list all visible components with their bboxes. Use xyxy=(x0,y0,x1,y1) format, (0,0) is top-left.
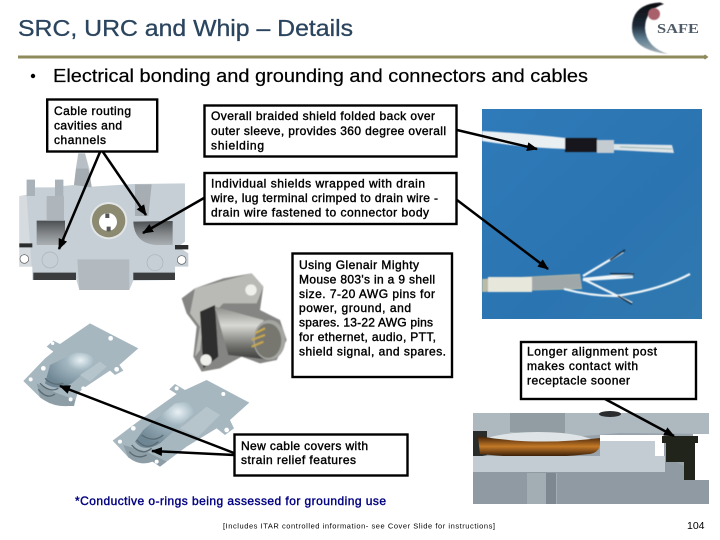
callout: alignment post xyxy=(521,342,696,399)
callout: Glenair connector: spares. 13-22 AWG pins xyxy=(299,316,433,330)
callout: cable covers xyxy=(234,434,408,476)
callout: Glenair connector xyxy=(292,254,452,377)
arrows xyxy=(59,130,674,455)
callout: overall braided shield: shielding xyxy=(211,138,264,152)
braided shield cable xyxy=(482,131,674,153)
callout: cable routing: Cable routing xyxy=(54,104,131,118)
callout: individual shields: drain wire fastened to connector body xyxy=(211,206,429,220)
callout: Glenair connector: size. 7-20 AWG pins for xyxy=(299,287,435,301)
callout: Glenair connector: Mouse 803's in a 9 shell xyxy=(299,272,435,286)
cover plate 1 xyxy=(23,323,138,406)
image: Mighty Mouse connector xyxy=(182,273,287,372)
image: alignment post detail xyxy=(473,411,709,504)
callout: individual shields xyxy=(204,173,456,224)
callout: cable covers: New cable covers with xyxy=(241,439,368,453)
callout: cable routing xyxy=(47,100,157,152)
callout: Glenair connector: for ethernet, audio, PTT, xyxy=(299,330,436,344)
callout: cable covers: strain relief features xyxy=(241,453,356,467)
header rule xyxy=(18,54,708,60)
callout: alignment post: Longer alignment post xyxy=(527,344,658,358)
cover plate 2 xyxy=(113,380,249,467)
callout: cable routing: cavities and xyxy=(54,118,122,132)
callout: alignment post: makes contact with xyxy=(527,359,638,373)
bullet heading: Electrical bonding and grounding and connectors and cables xyxy=(53,66,588,86)
footnote: *Conductive o-rings being assessed for grounding use xyxy=(75,494,386,508)
callout: overall braided shield xyxy=(204,106,456,156)
callout: Glenair connector: shield signal, and spares. xyxy=(299,344,446,358)
logo: C-SAFE xyxy=(632,2,699,54)
image: housing drawing xyxy=(19,153,188,290)
logo: C-SAFE: SAFE xyxy=(657,22,699,37)
title: SRC, URC and Whip – Details xyxy=(18,15,353,41)
callout: overall braided shield: outer sleeve, provides 360 degree overall xyxy=(211,124,446,138)
callout: Glenair connector: Using Glenair Mighty xyxy=(299,258,419,272)
image: cable covers xyxy=(23,323,249,467)
callout: individual shields: wire, lug terminal crimped to drain wire - xyxy=(210,191,438,205)
callout: overall braided shield: Overall braided shield folded back over xyxy=(211,109,435,123)
callout: Glenair connector: power, ground, and xyxy=(299,301,411,315)
callout: individual shields: Individual shields wrapped with drain xyxy=(211,176,425,190)
individual shields cable xyxy=(482,250,690,304)
callout: alignment post: receptacle sooner xyxy=(527,374,630,388)
page number: 104 xyxy=(687,520,705,532)
callout: cable routing: channels xyxy=(54,133,106,147)
footer: ITAR notice: [Includes ITAR controlled information- see Cover Slide for instructions] xyxy=(223,522,495,530)
image: cable photos xyxy=(482,109,702,319)
